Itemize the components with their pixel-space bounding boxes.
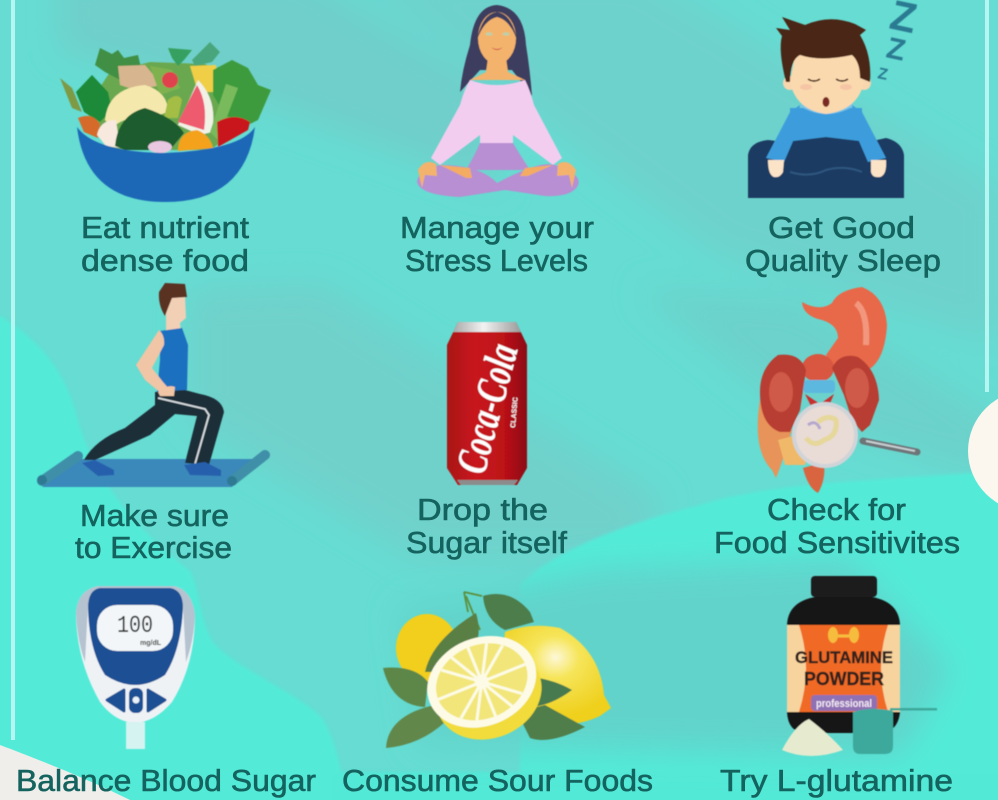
icon: digestive organs with magnifier [758, 287, 917, 493]
label: Get Good Quality Sleep [745, 210, 941, 278]
icon: glucose meter [76, 586, 195, 749]
label: Drop the Sugar itself: Drop the [417, 492, 548, 527]
icon: glutamine powder bottle: professional [816, 698, 872, 710]
icon: sleeping boy [748, 0, 921, 198]
label: Check for Food Sensitivites: Food Sensitivites [714, 525, 960, 560]
label: Manage your Stress Levels: Stress Levels [405, 243, 588, 278]
label: Check for Food Sensitivites [714, 492, 960, 560]
icon: glutamine powder bottle [782, 576, 937, 756]
icon: glucose meter: mg/dL [140, 640, 162, 647]
label: Drop the Sugar itself [406, 492, 567, 560]
icon: sleeping boy: Z [884, 32, 908, 68]
label: Check for Food Sensitivites: Check for [767, 492, 906, 527]
icon: lemons and leaves [383, 592, 611, 757]
icon: cola can: CLASSIC [510, 397, 520, 428]
label: Eat nutrient dense food: dense food [81, 243, 249, 278]
label: Eat nutrient dense food [81, 210, 249, 278]
icon: sleeping boy: Z [876, 65, 889, 84]
label: Eat nutrient dense food: Eat nutrient [81, 210, 249, 245]
cream circle right edge [968, 390, 998, 512]
icon: salad bowl [60, 42, 271, 202]
label: Make sure to Exercise [75, 498, 232, 565]
icon: glucose meter: 100 [117, 613, 153, 640]
label: Try L-glutamine: Try L-glutamine [720, 763, 953, 798]
label: Manage your Stress Levels [400, 210, 594, 278]
bowl body [77, 127, 255, 202]
icon: blanket [748, 137, 904, 198]
label: Make sure to Exercise: to Exercise [75, 530, 232, 565]
icon: cola can: Coca-Cola [446, 338, 528, 479]
icon: meditating woman [417, 5, 579, 197]
label: Consume Sour Foods: Consume Sour Foods [342, 763, 653, 798]
label: Manage your Stress Levels: Manage your [400, 210, 594, 245]
label: Balance Blood Sugar: Balance Blood Sugar [16, 763, 316, 798]
label: Drop the Sugar itself: Sugar itself [406, 525, 567, 560]
label: Get Good Quality Sleep: Quality Sleep [745, 243, 941, 278]
icon: glutamine powder bottle: GLUTAMINE [795, 648, 893, 667]
label: Get Good Quality Sleep: Get Good [768, 210, 915, 245]
icon: man lunging on mat [37, 283, 265, 487]
cream corner bottom left [0, 745, 130, 800]
icon: glutamine powder bottle: POWDER [804, 669, 884, 689]
icon: cola can [446, 322, 528, 485]
label: Make sure to Exercise: Make sure [80, 498, 229, 533]
